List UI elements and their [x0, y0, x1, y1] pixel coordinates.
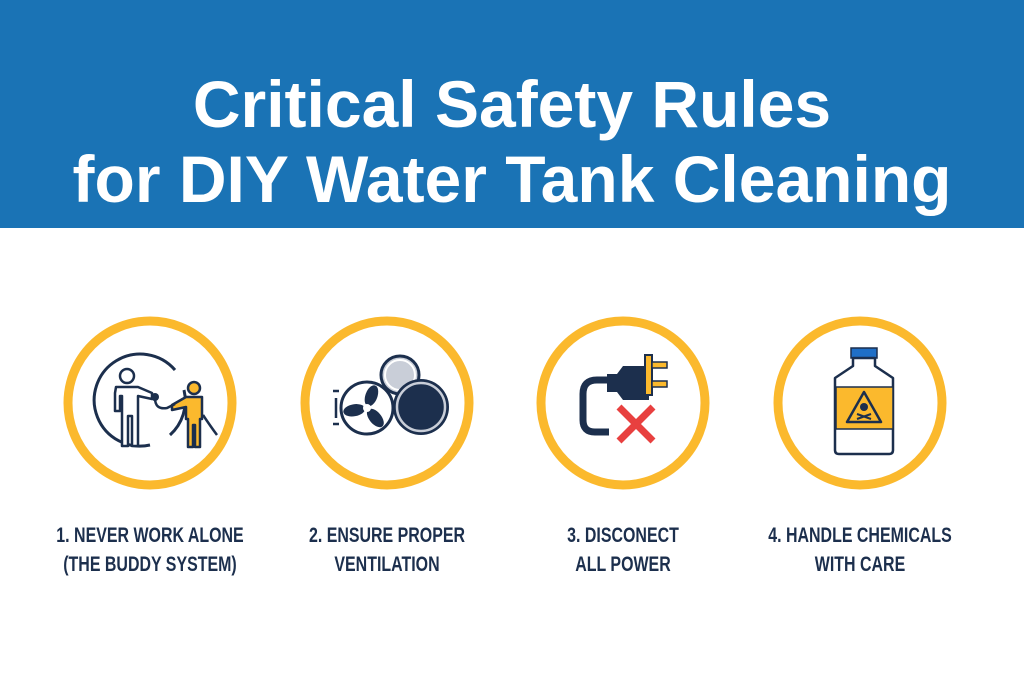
header banner — [0, 0, 1024, 228]
icon: unplugged power — [541, 321, 705, 485]
label 1: 1. NEVER WORK ALONE — [56, 524, 244, 547]
label 4: WITH CARE — [815, 553, 905, 576]
label 2: 2. ENSURE PROPER — [309, 524, 465, 547]
label 1 — [56, 524, 244, 576]
icon: ventilation — [305, 321, 469, 485]
icon: buddy system — [68, 321, 232, 485]
label 2: VENTILATION — [334, 553, 440, 576]
label 3: ALL POWER — [575, 553, 671, 576]
label 2 — [309, 524, 465, 576]
title: Critical Safety Rules — [193, 67, 831, 141]
label 3 — [567, 524, 679, 576]
label 3: 3. DISCONECT — [567, 524, 679, 547]
label 1: (THE BUDDY SYSTEM) — [63, 553, 237, 576]
title — [73, 67, 951, 216]
icon: chemical bottle — [778, 321, 942, 485]
label 4: 4. HANDLE CHEMICALS — [768, 524, 952, 547]
label 4 — [768, 524, 952, 576]
title: for DIY Water Tank Cleaning — [73, 142, 951, 216]
